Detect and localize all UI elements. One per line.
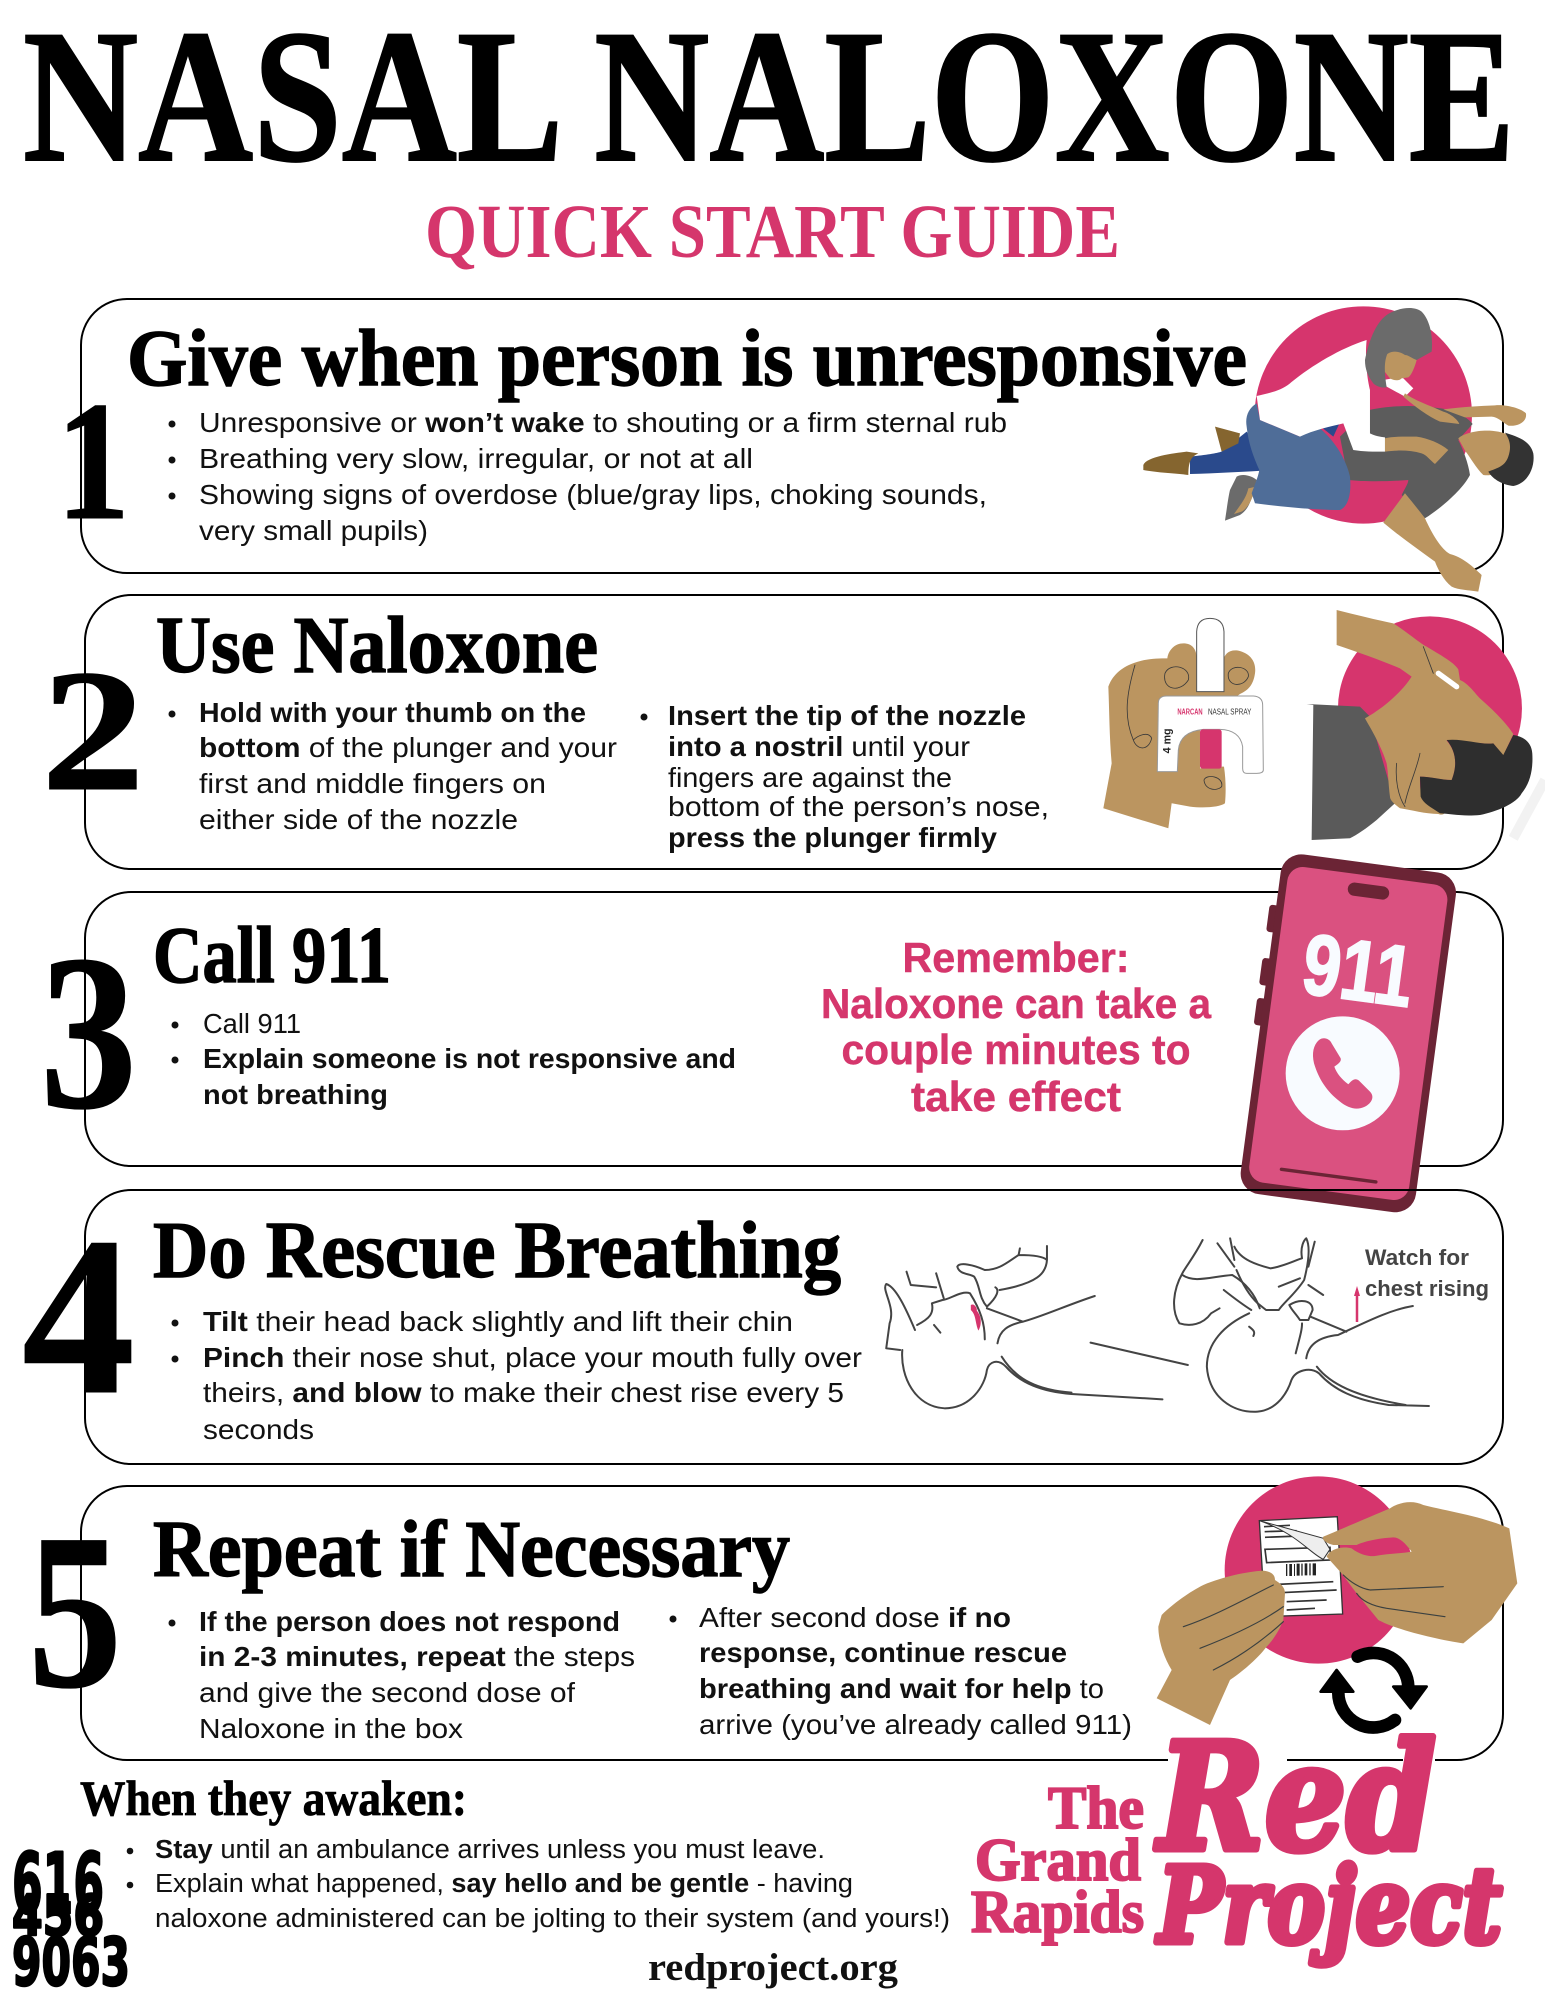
annotation: watch for chest rising: Watch for	[1365, 1245, 1469, 1270]
illustration: recovery check	[1143, 306, 1534, 592]
step 4 text: Pinch their nose shut, place your mouth fully over	[203, 1342, 862, 1373]
illustration: mouth to mouth	[1174, 1238, 1429, 1412]
panel: step 3	[40, 851, 1503, 1215]
step 2 right text: into a nostril until your	[668, 731, 970, 762]
step 2 right text: Insert the tip of the nozzle	[668, 700, 1026, 731]
phone number: 9063	[12, 1924, 130, 1999]
step 4 text: theirs, and blow to make their chest rise every 5	[203, 1377, 844, 1408]
step 2 right text: press the plunger firmly	[668, 822, 998, 853]
heading: when they awaken: When they awaken:	[80, 1770, 467, 1826]
step 3 heading: Call 911	[153, 912, 391, 1000]
callout: remember: couple minutes to	[842, 1026, 1190, 1073]
step 2 right text: fingers are against the	[668, 762, 952, 793]
icon: phone calling 911: 911	[1297, 916, 1419, 1026]
step 3 text	[172, 1008, 736, 1110]
step 1 heading: Give when person is unresponsive	[127, 315, 1247, 403]
subtitle: QUICK START GUIDE	[425, 190, 1120, 274]
step 5 right text: After second dose if no	[699, 1602, 1011, 1633]
step 3 text: Call 911	[203, 1008, 301, 1039]
step 3 number: 3	[40, 910, 137, 1156]
website url: redproject.org	[648, 1946, 899, 1989]
step 4 number: 4	[22, 1191, 135, 1441]
panel: step 2	[41, 595, 1545, 869]
illustration: hand holding nasal spray	[1103, 618, 1263, 828]
icon: phone calling 911	[1232, 851, 1459, 1215]
panel: step 5	[28, 1476, 1517, 1760]
step 2 left text: Hold with your thumb on the	[199, 697, 586, 728]
illustration: hand holding nasal spray: NASAL SPRAY	[1208, 708, 1252, 717]
step 5 right text: response, continue rescue	[699, 1637, 1067, 1668]
step 2 left text	[168, 697, 617, 835]
illustration: hand holding nasal spray: NARCAN	[1177, 708, 1203, 717]
illustration: spray in nostril	[1307, 610, 1545, 840]
step 5 right text: arrive (you’ve already called 911)	[699, 1709, 1132, 1740]
step 2 left text: first and middle fingers on	[199, 768, 546, 799]
step 4 heading: Do Rescue Breathing	[153, 1207, 841, 1295]
illustration: hand holding nasal spray: 4 mg	[1162, 728, 1174, 753]
step 5 heading: Repeat if Necessary	[153, 1506, 790, 1594]
step 1 text: Showing signs of overdose (blue/gray lips, choking sounds,	[199, 479, 987, 510]
step 2 left text: either side of the nozzle	[199, 804, 518, 835]
text: when they awaken list	[127, 1836, 950, 1933]
step 3 text: Explain someone is not responsive and	[203, 1043, 736, 1074]
step 3 text: not breathing	[203, 1079, 388, 1110]
text: when they awaken list: Stay until an ambulance arrives unless you must leave.	[155, 1836, 825, 1864]
step 2 right text	[640, 700, 1049, 853]
text: when they awaken list: naloxone administered can be jolting to their system (and yours!)	[155, 1905, 950, 1933]
phone number: 616	[12, 1835, 104, 1933]
icon: repeat arrows	[1321, 1653, 1427, 1727]
step 2 number: 2	[41, 634, 145, 827]
step 5 right text: breathing and wait for help to	[699, 1673, 1104, 1704]
callout: remember: Naloxone can take a	[821, 980, 1212, 1027]
callout: remember: Remember:	[902, 934, 1130, 981]
logo: The Grand Rapids Red Project: Rapids	[971, 1879, 1144, 1945]
step 1 text	[168, 407, 1007, 546]
step 5 left text: Naloxone in the box	[199, 1713, 463, 1744]
illustration: hands opening package	[1157, 1476, 1517, 1725]
step 5 left text: in 2-3 minutes, repeat the steps	[199, 1641, 635, 1672]
step 1 text: Unresponsive or won’t wake to shouting or a firm sternal rub	[199, 407, 1007, 438]
annotation: watch for chest rising: chest rising	[1365, 1276, 1489, 1301]
logo: The Grand Rapids Red Project: The	[1048, 1775, 1144, 1841]
step 5 left text: If the person does not respond	[199, 1606, 620, 1637]
logo: The Grand Rapids Red Project: Grand	[975, 1827, 1141, 1893]
step 5 left text	[168, 1606, 635, 1744]
step 2 heading: Use Naloxone	[156, 602, 598, 690]
step 5 right text	[670, 1602, 1132, 1740]
panel: step 4	[22, 1190, 1503, 1464]
annotation: watch for chest rising	[1354, 1245, 1489, 1322]
step 2 left text: bottom of the plunger and your	[199, 732, 617, 763]
callout: remember	[821, 934, 1212, 1120]
logo: The Grand Rapids Red Project: Red	[1155, 1710, 1436, 1884]
phone number	[12, 1835, 130, 1999]
step 4 text: seconds	[203, 1414, 314, 1445]
text: when they awaken list: Explain what happened, say hello and be gentle - having	[155, 1870, 853, 1898]
step 1 text: very small pupils)	[199, 515, 428, 546]
callout: remember: take effect	[911, 1073, 1121, 1120]
step 4 text: Tilt their head back slightly and lift their chin	[203, 1306, 793, 1337]
step 5 number: 5	[28, 1489, 122, 1735]
phone number: 456	[12, 1884, 104, 1949]
step 5 left text: and give the second dose of	[199, 1677, 575, 1708]
step 2 right text: bottom of the person’s nose,	[668, 791, 1049, 822]
step 1 text: Breathing very slow, irregular, or not at all	[199, 443, 753, 474]
logo: The Grand Rapids Red Project	[971, 1710, 1502, 1967]
panel: step 1	[56, 299, 1534, 592]
step 1 number: 1	[56, 367, 130, 555]
step 4 text	[172, 1306, 862, 1445]
illustration: head tilt	[885, 1246, 1188, 1408]
